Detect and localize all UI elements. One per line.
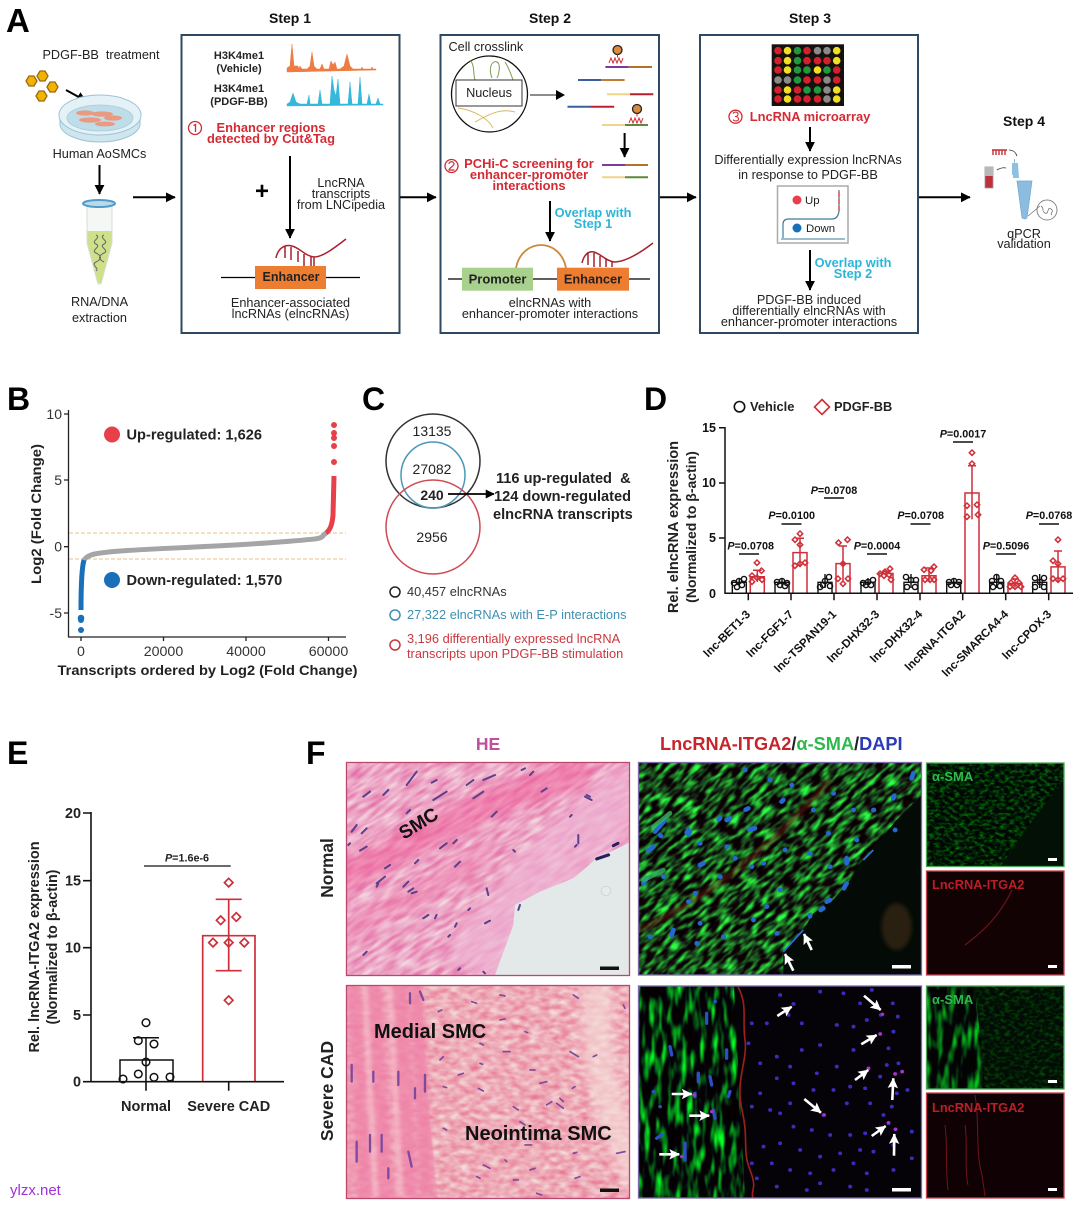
panel B: ranked fold change plot [7,381,358,678]
positive nuclei [682,1014,902,1157]
panel letter C: C [362,381,385,417]
blue down-regulated points [78,560,84,633]
axes [719,427,1073,600]
P values: P=0.0708 [897,510,944,522]
icon: capture probes [609,46,643,123]
P values: P=0.0708 [811,485,857,497]
x tick labels: lnc-SMARCA4-4 [940,608,1012,680]
axes [83,812,284,1091]
y tick labels: -5 [50,605,62,621]
y axis subtitle: (Normalized to β-actin) [683,451,699,603]
step 2 result: enhancer-promoter interactions [462,307,638,321]
overlap label: Overlap with [555,205,631,220]
panel E: bar chart of lncRNA-ITGA2 [7,735,284,1115]
y tick labels [702,421,716,601]
y tick labels [65,806,81,1090]
icon: qPCR [985,150,1057,220]
panel A: workflow [6,2,1057,333]
step 3 result: differentially elncRNAs with [732,304,886,318]
diagram: enhancer with transcript: Enhancer [263,270,320,284]
arrow: overlap step 1 [549,201,551,241]
panel: step 1 [182,35,400,333]
arrow: LncRNA transcripts [289,156,291,238]
step 2 result: elncRNAs with [509,296,591,310]
chart: vehicle peaks [287,44,376,72]
panel letter E: E [7,735,28,771]
scale bar [892,1188,911,1192]
venn counts: 240 [420,487,444,503]
x labels: Severe CAD [187,1099,270,1115]
arrow to step 1 [133,196,175,198]
x tick labels: lncRNA-ITGA2 [902,608,968,674]
panel: step 2 [440,35,659,333]
overlap callout text: 116 up-regulated & [496,471,631,487]
panel C: Venn diagram [362,381,633,661]
HE normal frame [346,762,630,976]
alpha-SMA normal frame and label: α-SMA [932,769,974,784]
y tick labels: 20 [65,806,81,822]
legend: differentially expressed: transcripts upon PDGF-BB stimulation [407,646,623,661]
overlap label: Overlap with [815,255,891,270]
y tick labels: 10 [65,940,81,956]
y tick labels: 5 [54,472,62,488]
overlap label: Step 2 [834,266,872,281]
HE column title: HE [476,734,500,754]
arrow to step 3 [660,196,696,198]
step 4 label: validation [997,237,1051,251]
diagram: promoter and enhancer loop [448,243,653,291]
step 1 result: Enhancer-associated [231,296,350,310]
label: SMC: SMC [396,804,443,844]
legend: elncRNAs: 40,457 elncRNAs [407,584,507,599]
bar: severe CAD [203,878,255,1082]
y tick labels: 5 [73,1008,81,1024]
HE scale bar [600,1188,619,1192]
HE scale bar [600,966,619,970]
image: LncRNA-ITGA2 severe [926,1093,1064,1198]
colocalization arrows [659,996,894,1156]
x tick labels: lnc-FGF1-7 [744,608,796,660]
DAPI nuclei [643,770,913,943]
label: Medial SMC: Medial SMC [374,1021,486,1043]
x tick labels: 40000 [226,644,266,660]
venn circles [386,414,480,574]
image: LncRNA-ITGA2 normal: LncRNA-ITGA2 [932,877,1024,892]
panel letter D: D [644,381,667,417]
LNCipedia label: transcripts [312,187,370,201]
x tick labels: 20000 [144,644,183,660]
panel letter F: F [306,735,326,771]
PDGF-BB points [749,450,1066,589]
P values: P=0.5096 [983,540,1029,552]
overlap callout text: 124 down-regulated [494,489,631,505]
y tick labels: 0 [54,538,62,554]
x tick labels [701,608,1055,680]
vehicle points [731,574,1047,590]
y tick labels: 10 [46,406,62,422]
alpha-SMA severe frame and label [926,986,1064,1089]
row label: normal: Normal [317,838,337,898]
axes [64,410,346,641]
x tick labels: 60000 [309,644,348,660]
P values: P=0.0708 [727,540,774,552]
chart: PDGF-BB peaks [287,76,383,106]
image: alpha-SMA normal [926,763,1064,867]
arrow: nucleus to fragments [530,90,565,100]
row label: severe CAD: Severe CAD [317,1041,337,1141]
image: merged severe CAD [638,986,922,1198]
scale bar [892,965,911,968]
y axis title: Rel. lncRNA-ITGA2 expression [27,841,43,1053]
medial nuclei [352,992,425,1178]
venn counts: 2956 [416,529,448,545]
image: alpha-SMA severe [926,986,1064,1089]
arrow to step 2 [400,196,436,198]
extraction label: RNA/DNA [71,295,128,309]
nuclei [348,768,618,973]
x labels [121,1099,270,1115]
alpha-SMA normal frame and label [926,763,1064,866]
P values: P=0.0768 [1026,510,1072,522]
x tick labels: 0 [77,644,85,660]
callout: step 2 number [445,160,458,172]
arrow: microarray to result [809,127,811,151]
overlap label: Step 1 [574,216,612,231]
y tick labels: 15 [702,421,716,435]
x labels: Normal [121,1099,171,1115]
IF column title: LncRNA-ITGA2/α-SMA/DAPI [660,734,903,754]
red internal elastic lamina [738,987,754,1198]
y tick labels: 15 [65,874,81,890]
merged normal frame [638,762,922,975]
diagram: promoter and enhancer loop: Enhancer [564,272,622,286]
chart: mini fold change: Up [805,195,820,207]
neointima nuclei [438,995,625,1195]
alpha-SMA severe frame and label: α-SMA [932,992,974,1007]
x tick labels: lnc-DHX32-3 [825,608,883,665]
lumen [783,793,923,977]
venn counts: 27082 [413,461,452,477]
track labels: (PDGF-BB) [210,96,268,108]
bar: normal [119,1019,174,1083]
chart: mini fold change: Down [806,223,835,235]
step 3 red caption: LncRNA microarray [750,109,871,124]
track labels: (Vehicle) [216,63,262,75]
y tick labels: 0 [73,1074,81,1090]
icon: culture dish [59,95,141,142]
x tick labels [77,644,348,660]
x axis title: Transcripts ordered by Log2 (Fold Change) [58,662,358,678]
y tick labels: 5 [709,531,716,545]
HE severe frame [346,986,630,1198]
legend [734,399,892,414]
step 3 result: PDGF-BB induced [757,293,861,307]
diagram: DNA fragments [568,67,653,125]
diagram: captured fragments [602,165,648,177]
panel letter A: A [6,2,30,39]
y tick labels [46,406,62,621]
merged severe frame [638,986,922,1198]
diagram: promoter and enhancer loop: Promoter [469,272,526,286]
threshold lines [69,533,346,559]
PDGF-BB treatment of cells [26,48,160,161]
LNCipedia label: from LNCipedia [297,198,386,212]
step 3 result: enhancer-promoter interactions [721,315,897,329]
differential expression text: in response to PDGF-BB [738,168,878,182]
icon: extraction tube [83,200,115,284]
red up-regulated points [326,422,337,533]
cells label: Human AoSMCs [53,147,146,161]
vehicle bars [732,574,1047,593]
arrow down to extraction [98,165,100,194]
legend: PDGF-BB [834,399,892,414]
legend: Vehicle [750,399,794,414]
P values: P=0.0100 [768,510,815,522]
overlap callout text: elncRNA transcripts [493,507,633,523]
icon: microarray [772,44,844,106]
step 4 label: qPCR [1007,227,1041,241]
colocalization arrows [785,934,812,971]
PDGF-BB bars [750,466,1065,593]
legend: differentially expressed [390,631,623,661]
track labels: H3K4me1 [214,83,264,95]
panel: step 3 [700,35,918,333]
x tick labels: lnc-TSPAN19-1 [772,608,840,675]
arrow: overlap result [448,493,494,495]
diagram: enhancer with transcript [221,239,360,289]
step 3 heading: Step 3 [789,10,831,26]
y tick labels: 0 [709,587,716,601]
chart: mini fold change [778,186,848,243]
lumen [495,842,630,975]
step 1 red caption: Enhancer regions [217,120,325,135]
legend: down-regulated: Down-regulated: 1,570 [126,573,282,589]
x tick labels: lnc-CPOX-3 [1000,608,1055,662]
y axis title: Log2 (Fold Change) [28,444,44,584]
differential expression text: Differentially expression lncRNAs [714,153,902,167]
y tick labels: 10 [702,476,716,490]
legend: E-P interactions: 27,322 elncRNAs with E-P interactions [407,607,627,622]
legend: differentially expressed: 3,196 differentially expressed lncRNA [407,631,620,646]
step 2 red caption: PCHi-C screening for [464,156,594,171]
arrow: overlap step 2 [809,250,811,290]
significance [144,852,231,866]
plus sign: + [255,178,269,205]
panel letter B: B [7,381,30,417]
diagram: nucleus: Nucleus [466,86,512,100]
P values: P=0.0004 [854,540,900,552]
image: HE severe CAD [346,983,640,1199]
left nuclei [653,1002,730,1160]
image: LncRNA-ITGA2 normal [926,871,1064,975]
y axis subtitle: (Normalized to β-actin) [45,869,61,1024]
step 2 red caption: enhancer-promoter [470,167,588,182]
label: Neointima SMC: Neointima SMC [465,1123,612,1145]
step 2 heading: Step 2 [529,10,571,26]
right nuclei [748,990,912,1190]
step 4 heading: Step 4 [1003,113,1045,129]
panel F: histology and immunofluorescence [308,736,1065,1200]
legend: up-regulated: Up-regulated: 1,626 [126,428,262,444]
LNCipedia label: LncRNA [317,176,365,190]
panel D: bar chart of elncRNA expression [644,381,1073,680]
venn counts [413,423,452,545]
image: merged normal [639,763,921,974]
P values [727,428,1072,552]
arrow: capture [624,133,626,157]
P values: P=0.0017 [940,428,986,440]
grey transcripts curve [84,533,326,560]
significance brackets [739,442,1059,554]
extraction label: extraction [72,311,127,325]
step 1 result: lncRNAs (elncRNAs) [232,307,349,321]
treatment label: PDGF-BB treatment [42,48,160,62]
step 1 heading: Step 1 [269,10,311,26]
diagram: nucleus [452,56,528,132]
callout: step 3 number [729,110,742,123]
crosslink label: Cell crosslink [448,40,524,54]
step 2 red caption: interactions [492,178,566,193]
significance: P=1.6e-6 [165,852,209,864]
watermark: ylzx.net [10,1182,62,1199]
step 1 red caption: detected by Cut&Tag [207,131,335,146]
venn counts: 13135 [413,423,452,439]
x tick labels: lnc-DHX32-4 [868,608,926,665]
image: LncRNA-ITGA2 severe: LncRNA-ITGA2 [932,1100,1024,1115]
track labels: H3K4me1 [214,50,264,62]
y axis title: Rel. elncRNA expression [666,441,682,613]
arrow to dish [66,90,86,101]
icon: PDGF-BB molecules [26,71,58,101]
arrow to step 4 [919,196,970,198]
image: HE normal [347,763,629,975]
callout: step 1 number [188,122,202,134]
x tick labels: lnc-BET1-3 [701,608,754,660]
